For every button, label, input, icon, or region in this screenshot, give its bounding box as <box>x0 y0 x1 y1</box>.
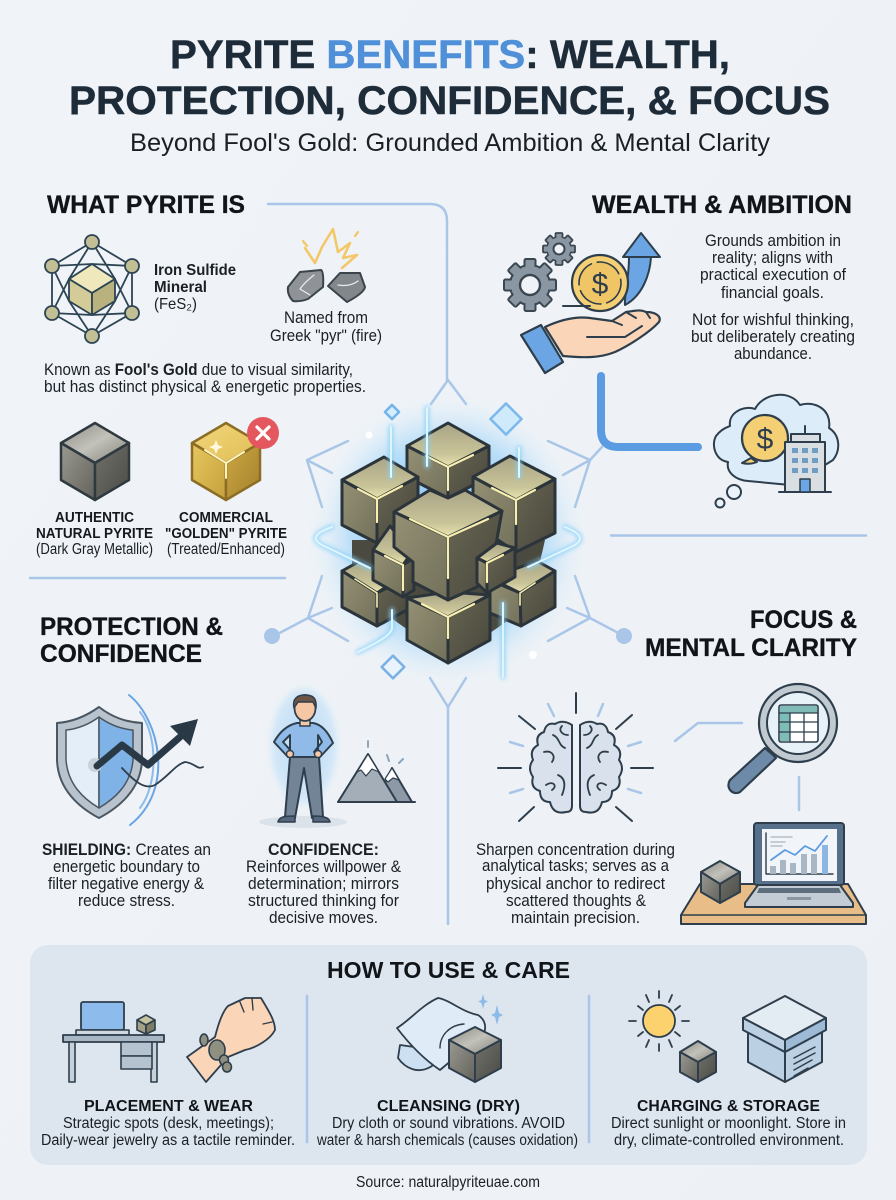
caption: golden pyrite: COMMERCIAL <box>179 510 273 526</box>
text: named from greek <box>270 309 382 345</box>
text: charging & storage: dry, climate-controlled environment. <box>614 1132 844 1149</box>
text: sharpen concentration: scattered thoughts & <box>506 892 646 910</box>
crystal energy lines <box>316 408 580 677</box>
icon: thought bubble <box>714 395 838 508</box>
icon: coin <box>563 255 628 311</box>
icon: small gear <box>543 233 575 265</box>
crystal glow <box>313 398 583 682</box>
icon: storage box <box>743 996 826 1082</box>
text: cleansing: water & harsh chemicals (causes oxidation) <box>316 1132 578 1149</box>
text: not for wishful thinking: but deliberately creating <box>691 328 855 346</box>
text: sharpen concentration: maintain precision. <box>511 909 640 927</box>
text: charging & storage <box>611 1098 846 1149</box>
text: not for wishful thinking <box>691 311 855 363</box>
panel: focus & mental clarity <box>476 606 866 927</box>
heading: focus & mental clarity <box>645 606 857 662</box>
text: named from greek: Greek "pyr" (fire) <box>270 327 382 345</box>
text: confidence: CONFIDENCE: <box>268 841 379 859</box>
cube: centre large <box>394 490 502 600</box>
icon: natural pyrite cube <box>61 423 129 500</box>
caption: golden pyrite: (Treated/Enhanced) <box>167 541 285 558</box>
text: confidence: determination; mirrors <box>248 875 399 893</box>
heading: focus & mental clarity: FOCUS & <box>750 606 857 634</box>
heading: protection & confidence: PROTECTION & <box>40 613 223 641</box>
caption: natural pyrite: NATURAL PYRITE <box>36 526 153 542</box>
icon: desk with laptop and cube <box>681 823 866 924</box>
caption: golden pyrite <box>165 510 287 558</box>
text: shielding <box>42 841 211 910</box>
text: shielding: filter negative energy & <box>48 875 204 893</box>
text: placement & wear: Strategic spots (desk, meetings); <box>63 1115 274 1132</box>
cube: right <box>473 456 555 552</box>
text: iron sulfide mineral: (FeS₂) <box>154 296 197 313</box>
main title: PROTECTION, CONFIDENCE, & FOCUS <box>69 79 830 123</box>
text: iron sulfide mineral <box>154 262 236 313</box>
main title <box>69 33 830 123</box>
text: cleansing: CLEANSING (DRY) <box>377 1098 520 1115</box>
icon: thought bubble: $ <box>757 423 774 456</box>
icon: small pyrite cube <box>680 1041 716 1082</box>
text: placement & wear: PLACEMENT & WEAR <box>84 1098 253 1115</box>
text: confidence: structured thinking for <box>248 892 399 910</box>
heading: protection & confidence <box>40 613 223 668</box>
icon: brain <box>498 693 653 821</box>
caption: natural pyrite <box>36 510 153 558</box>
central pyrite crystal <box>313 398 583 682</box>
text: shielding: energetic boundary to <box>53 858 200 876</box>
text: shielding: reduce stress. <box>78 892 175 910</box>
text: cleansing <box>316 1098 578 1149</box>
crystal cubes <box>342 423 555 663</box>
text: fool's gold: Known as Fool's Gold due to visual similarity, <box>44 361 353 379</box>
text: iron sulfide mineral: Iron Sulfide <box>154 262 236 279</box>
panel: what pyrite is <box>36 191 382 558</box>
dividers <box>307 996 589 1142</box>
icon: coin: $ <box>592 268 609 301</box>
heading: what pyrite is: WHAT PYRITE IS <box>47 191 245 219</box>
cube: lower left <box>342 561 407 626</box>
text: sharpen concentration <box>476 841 675 927</box>
text: confidence <box>246 841 401 927</box>
icon: cloth and cube <box>397 994 503 1082</box>
text: grounds ambition: Grounds ambition in <box>705 232 841 250</box>
text: placement & wear <box>41 1098 295 1149</box>
source line: Source: naturalpyriteuae.com <box>356 1174 540 1191</box>
text: not for wishful thinking: Not for wishful thinking, <box>692 311 854 329</box>
cube: top back <box>407 423 489 498</box>
icon: desk <box>63 1002 164 1082</box>
cube: lower right <box>490 561 555 626</box>
icon: wrist with bracelet <box>187 998 275 1082</box>
text: sharpen concentration: Sharpen concentration during <box>476 841 675 859</box>
icon: mountains <box>338 741 415 802</box>
panel: protection & confidence <box>40 613 415 927</box>
caption: natural pyrite: (Dark Gray Metallic) <box>36 541 153 558</box>
panel: how to use & care <box>30 945 867 1165</box>
cube: small right <box>477 543 515 593</box>
icon: shield <box>57 695 203 825</box>
text: grounds ambition <box>700 232 846 302</box>
cube: lower centre <box>407 592 490 663</box>
heading: focus & mental clarity: MENTAL CLARITY <box>645 634 857 662</box>
heading: protection & confidence: CONFIDENCE <box>40 640 202 668</box>
icon: rising zigzag arrow <box>97 719 198 766</box>
crystal diamonds <box>366 403 537 678</box>
text: fool's gold <box>44 361 366 396</box>
caption: golden pyrite: "GOLDEN" PYRITE <box>165 526 287 542</box>
text: grounds ambition: reality; aligns with <box>712 249 833 267</box>
text: shielding: SHIELDING: Creates an <box>42 841 211 859</box>
icon: large gear <box>504 259 556 311</box>
text: iron sulfide mineral: Mineral <box>154 279 207 296</box>
crystal highlights <box>355 455 535 638</box>
text: charging & storage: CHARGING & STORAGE <box>637 1098 820 1115</box>
cube: small left <box>373 526 414 597</box>
icon: red cross badge <box>247 417 279 449</box>
text: sharpen concentration: physical anchor to redirect <box>486 875 665 893</box>
panel: wealth & ambition <box>504 191 855 508</box>
heading: wealth & ambition: WEALTH & AMBITION <box>592 191 852 219</box>
arrow: blue elbow connector <box>601 376 698 447</box>
crystal energy highlights <box>316 408 580 677</box>
icon: crystal lattice <box>45 235 139 343</box>
icon: rising arrow <box>623 233 660 305</box>
icon: sparking rocks <box>288 229 365 302</box>
text: named from greek: Named from <box>284 309 368 327</box>
icon: magnifier <box>728 684 837 793</box>
icon: confident person <box>259 686 347 828</box>
text: cleansing: Dry cloth or sound vibrations. AVOID <box>332 1115 565 1132</box>
icon: open hand <box>521 310 660 373</box>
text: not for wishful thinking: abundance. <box>734 345 812 363</box>
icon: golden pyrite cube <box>192 423 260 500</box>
text: grounds ambition: financial goals. <box>721 284 824 302</box>
text: charging & storage: Direct sunlight or moonlight. Store in <box>611 1115 846 1132</box>
main title: PYRITE BENEFITS: WEALTH, <box>170 33 730 77</box>
text: confidence: Reinforces willpower & <box>246 858 401 876</box>
connector lines <box>30 204 866 924</box>
panel background <box>30 945 867 1165</box>
text: grounds ambition: practical execution of <box>700 266 846 284</box>
caption: natural pyrite: AUTHENTIC <box>55 510 134 526</box>
text: sharpen concentration: analytical tasks; serves as a <box>482 857 670 875</box>
text: placement & wear: Daily-wear jewelry as a tactile reminder. <box>41 1132 295 1149</box>
subtitle: Beyond Fool's Gold: Grounded Ambition & Mental Clarity <box>130 129 771 157</box>
icon: sun <box>629 991 689 1051</box>
heading: how to use & care: HOW TO USE & CARE <box>327 957 570 983</box>
text: confidence: decisive moves. <box>269 909 378 927</box>
text: fool's gold: but has distinct physical & energetic properties. <box>44 378 366 396</box>
cube: left <box>342 457 418 543</box>
